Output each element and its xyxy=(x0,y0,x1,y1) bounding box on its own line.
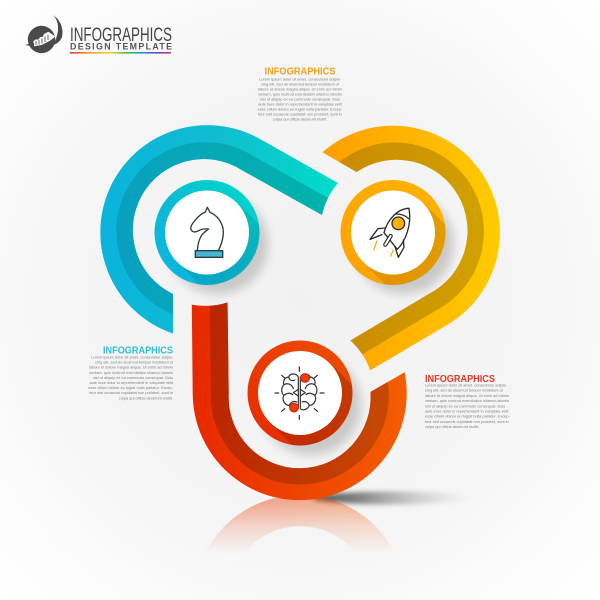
band: red xyxy=(142,229,441,539)
text block: right xyxy=(425,374,510,429)
heading: right: INFOGRAPHICS xyxy=(425,374,495,385)
body: top: esse cillum dolore eu fugiat nulla pariatur. Excep- xyxy=(258,106,343,112)
body: left: culpa qui officia deserunt mollit. xyxy=(119,395,173,400)
body: left: nisi ut aliquip ex ea commodo consequat. Duis xyxy=(93,375,173,380)
logo icon xyxy=(25,15,63,53)
body: right: veniam, quis nostrud exercitation ullamco laboris xyxy=(425,398,509,403)
body: right: culpa qui officia deserunt mollit. xyxy=(425,424,479,429)
body: left: cing elit, sed do eiusmod tempor incididunt ut xyxy=(95,360,174,365)
body: right: esse cillum dolore eu fugiat nulla pariatur. Excep- xyxy=(425,414,510,419)
icon: rocket xyxy=(370,208,410,257)
text block: left xyxy=(88,346,174,400)
body: top: cing elit, sed do eiusmod tempor incididunt ut xyxy=(261,82,340,86)
body: left xyxy=(88,354,174,400)
logo xyxy=(25,15,172,54)
logo title: INFOGRAPHICS xyxy=(70,24,172,46)
body: top: Lorem ipsum dolor sit amet, consectetur adipis- xyxy=(259,76,342,82)
body: left: esse cillum dolore eu fugiat nulla pariatur. Excep- xyxy=(88,385,174,390)
heading: top: INFOGRAPHICS xyxy=(264,66,336,78)
node: orange circle xyxy=(340,180,458,298)
body: right: Lorem ipsum dolor sit amet, consectetur adipis- xyxy=(425,382,507,388)
body: right: aute irure dolor in reprehenderit in voluptate velit xyxy=(425,408,509,414)
text block: top xyxy=(258,66,343,122)
body: right: nisi ut aliquip ex ea commodo consequat. Duis xyxy=(425,403,505,408)
reflection of red band xyxy=(208,498,392,548)
heading: left: INFOGRAPHICS xyxy=(103,346,173,356)
node: red circle xyxy=(248,340,365,459)
body: right: teur sint occaecat cupidatat non proident, sunt in xyxy=(425,419,509,424)
body: top: labore et dolore magna aliqua. Ut enim ad minim xyxy=(258,86,342,92)
body: top: veniam, quis nostrud exercitation ullamco laboris xyxy=(258,92,342,96)
icon: brain xyxy=(275,367,324,419)
body: right: cing elit, sed do eiusmod tempor incididunt ut xyxy=(425,388,504,393)
floor shadow xyxy=(312,492,472,504)
body: left: veniam, quis nostrud exercitation ullamco laboris xyxy=(89,370,173,375)
body: left: aute irure dolor in reprehenderit in voluptate velit xyxy=(90,380,174,385)
body: top: nisi ut aliquip ex ea commodo consequat. Duis xyxy=(260,96,340,102)
body: top: teur sint occaecat cupidatat non proident, sunt in xyxy=(258,112,342,116)
body: left: labore et dolore magna aliqua. Ut enim ad minim xyxy=(89,365,173,370)
body: top: culpa qui officia deserunt mollit. xyxy=(273,116,327,122)
band: orange xyxy=(240,89,539,399)
body: top: aute irure dolor in reprehenderit in voluptate velit xyxy=(258,102,343,106)
body: right: labore et dolore magna aliqua. Ut enim ad minim xyxy=(425,393,509,398)
body: top xyxy=(258,76,343,122)
body: right xyxy=(425,382,510,429)
logo rainbow rule xyxy=(70,52,171,54)
body: left: Lorem ipsum dolor sit amet, consectetur adipis- xyxy=(91,354,174,360)
logo subtitle: DESIGN TEMPLATE xyxy=(70,42,172,52)
node: blue circle xyxy=(154,180,272,298)
icon: chess knight xyxy=(191,207,223,257)
body: left: teur sint occaecat cupidatat non proident, sunt in xyxy=(89,390,173,395)
band: blue xyxy=(100,125,338,333)
